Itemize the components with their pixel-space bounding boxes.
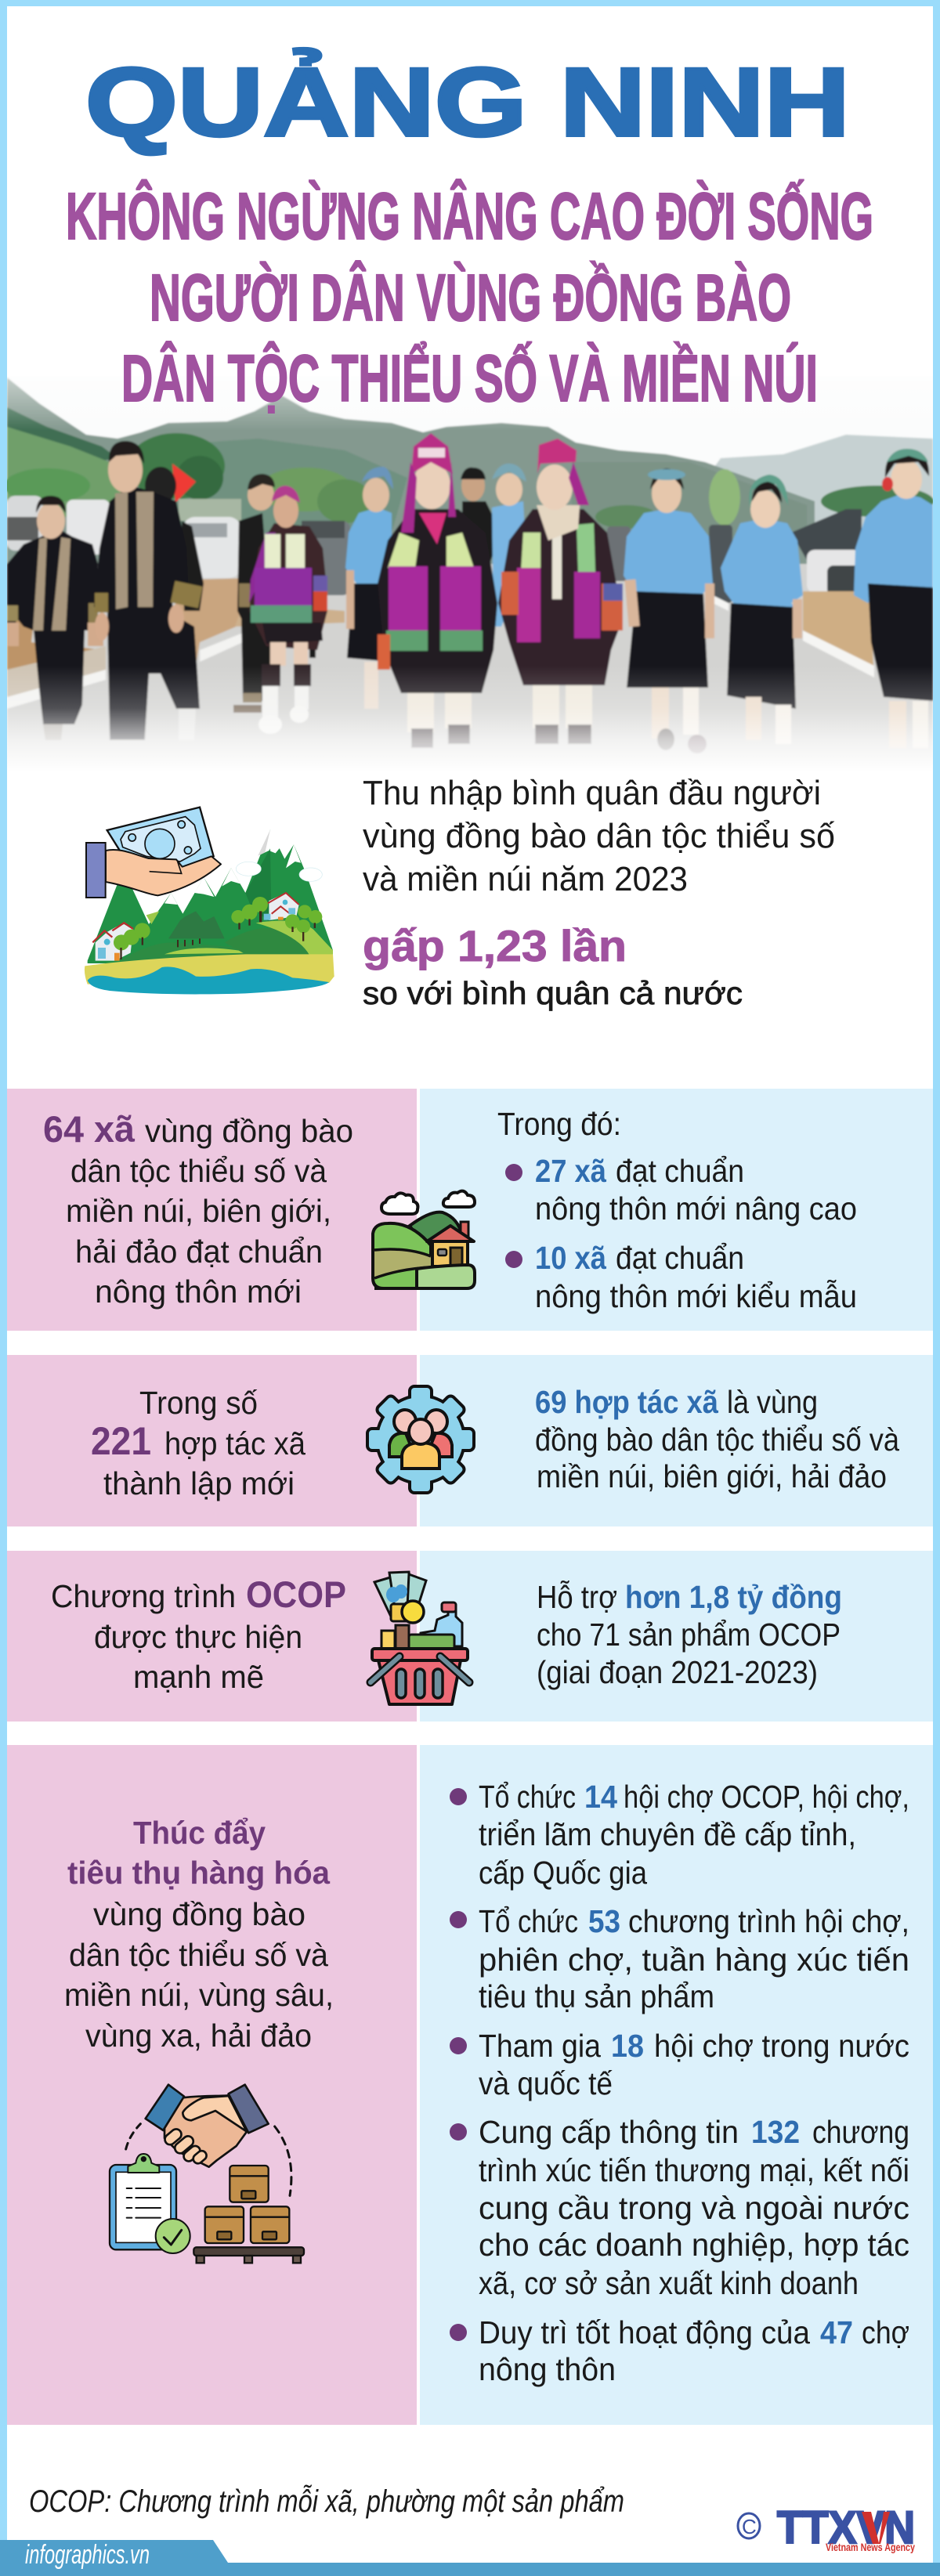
right text [535, 1384, 899, 1494]
list: activities: hội chợ trong nước [654, 2028, 909, 2064]
left text: vùng đồng bào [145, 1113, 353, 1149]
list: activities: Cung cấp thông tin [479, 2114, 739, 2150]
list: activities: xã, cơ sở sản xuất kinh doanh [479, 2265, 859, 2301]
list: activities: 47 [820, 2314, 853, 2350]
icon: hand holding money over mountain landscape [85, 807, 334, 994]
left text: 221 [91, 1419, 151, 1463]
left text: Trong số [139, 1385, 258, 1421]
left text: vùng xa, hải đảo [85, 2018, 312, 2054]
left text: nông thôn mới [95, 1274, 302, 1310]
list: activities: nông thôn [479, 2351, 616, 2387]
right text: 27 xã [535, 1153, 606, 1189]
photo: ethnic minority people walking on a mountain road [4, 376, 934, 779]
footer bar with site name [0, 2540, 940, 2576]
list: activities: chương [812, 2114, 909, 2150]
list: activities: phiên chợ, tuần hàng xúc tiến [479, 1942, 909, 1978]
list: activities: tiêu thụ sản phẩm [479, 1978, 714, 2014]
left text: hợp tác xã [164, 1425, 306, 1461]
right text: cho 71 sản phẩm OCOP [537, 1617, 841, 1653]
right text: nông thôn mới kiểu mẫu [535, 1278, 857, 1314]
footnote: OCOP definition: OCOP: Chương trình mỗi xã, phường một sản phẩm [29, 2484, 624, 2519]
footer bar with site name: infographics.vn [25, 2540, 150, 2570]
panel: 221 cooperatives [7, 1355, 933, 1526]
right text: nông thôn mới nâng cao [535, 1190, 857, 1227]
intro text [363, 774, 835, 1011]
list: activities: cấp Quốc gia [479, 1855, 647, 1891]
right text: là vùng [727, 1384, 818, 1420]
person: main woman in magenta headdress [378, 433, 497, 748]
list: activities: Duy trì tốt hoạt động của [479, 2314, 810, 2350]
right text: đạt chuẩn [616, 1240, 744, 1276]
left text: Thúc đẩy [133, 1815, 266, 1851]
far mountains [714, 434, 933, 526]
left text: OCOP [246, 1573, 346, 1615]
list: activities [450, 1779, 909, 2387]
left text [43, 1108, 353, 1310]
person: woman in blue top center-right [624, 468, 714, 753]
right text: hơn 1,8 tỷ đồng [625, 1579, 842, 1615]
left text [64, 1815, 334, 2054]
person: woman in blue top right [721, 475, 803, 744]
person: woman in blue top behind [345, 467, 393, 709]
person: woman with purple fringe [249, 486, 327, 734]
left text [91, 1385, 306, 1501]
panel: 64 communes [7, 1089, 933, 1331]
list: activities: 132 [751, 2114, 800, 2150]
title: QUẢNG NINH [85, 48, 850, 157]
list: activities: cho các doanh nghiệp, hợp tác [479, 2227, 909, 2263]
list: activities: và quốc tế [479, 2065, 613, 2101]
left text: hải đảo đạt chuẩn [75, 1234, 323, 1270]
right text: đồng bào dân tộc thiểu số và [535, 1422, 899, 1458]
left text [51, 1573, 346, 1695]
list: activities: chợ [862, 2314, 909, 2350]
left text: 64 xã [43, 1108, 136, 1150]
left text: tiêu thụ hàng hóa [67, 1855, 331, 1891]
right text: miền núi, biên giới, hải đảo [537, 1458, 887, 1494]
left text: thành lập mới [103, 1465, 295, 1501]
right text: đạt chuẩn [616, 1153, 744, 1189]
comparison line: so với bình quân cả nước [363, 975, 743, 1011]
man behind tall man [145, 467, 204, 611]
intro text: và miền núi năm 2023 [363, 860, 688, 898]
man behind center-left [233, 474, 316, 713]
list: activities: Tổ chức [479, 1779, 576, 1815]
left text: mạnh mẽ [133, 1659, 264, 1695]
key figure: gấp 1,23 lần [363, 921, 627, 970]
person: man in black left [7, 496, 103, 740]
intro text: Thu nhập bình quân đầu người [363, 774, 821, 812]
left text: dân tộc thiểu số và [69, 1937, 328, 1973]
list: activities: 14 [584, 1779, 617, 1815]
list: activities: Tham gia [479, 2028, 601, 2064]
left text: miền núi, vùng sâu, [64, 1977, 334, 2013]
list: activities: cung cầu trong và ngoài nước [479, 2190, 909, 2226]
list: activities: Tổ chức [479, 1903, 578, 1939]
logo: TTXVN: TTXVN [777, 2502, 915, 2553]
person: tall man in black [94, 441, 203, 740]
subtitle [66, 179, 873, 415]
cars parked behind [7, 496, 43, 551]
panel: promoting consumption of goods [7, 1745, 933, 2425]
left text: vùng đồng bào [93, 1896, 306, 1932]
people behind the two main women [461, 464, 526, 627]
right text: Trong đó: [497, 1106, 621, 1142]
right text [537, 1579, 842, 1690]
icon: shopping basket with money [371, 1572, 469, 1704]
right text: 69 hợp tác xã [535, 1384, 718, 1420]
left text: miền núi, biên giới, [66, 1193, 331, 1229]
right text: (giai đoạn 2021-2023) [537, 1654, 818, 1690]
left text: được thực hiện [94, 1619, 302, 1655]
right text: Hỗ trợ [537, 1579, 617, 1615]
person: second main woman [498, 439, 623, 744]
icon: handshake, clipboard and boxes [110, 2085, 304, 2263]
list: activities: 18 [611, 2028, 644, 2064]
intro text: vùng đồng bào dân tộc thiểu số [363, 817, 835, 855]
logo: TTXVN: C [742, 2515, 757, 2538]
right text: 10 xã [535, 1240, 606, 1276]
left text: Chương trình [51, 1578, 236, 1614]
dirt roadside [175, 578, 240, 660]
icon: gear with people [369, 1388, 472, 1491]
left text: dân tộc thiểu số và [70, 1153, 327, 1189]
list: activities: 53 [588, 1903, 620, 1939]
right text [497, 1106, 857, 1314]
icon: rural house and fields [373, 1191, 475, 1288]
panel: OCOP programme [7, 1551, 933, 1722]
list: activities: trình xúc tiến thương mại, kết nối [479, 2152, 909, 2188]
list: activities: triển lãm chuyên đề cấp tỉnh, [479, 1816, 856, 1852]
logo: TTXVN: Vietnam News Agency [826, 2541, 915, 2553]
list: activities: chương trình hội chợ, [628, 1903, 909, 1939]
person: woman in blue top far right [854, 449, 933, 748]
